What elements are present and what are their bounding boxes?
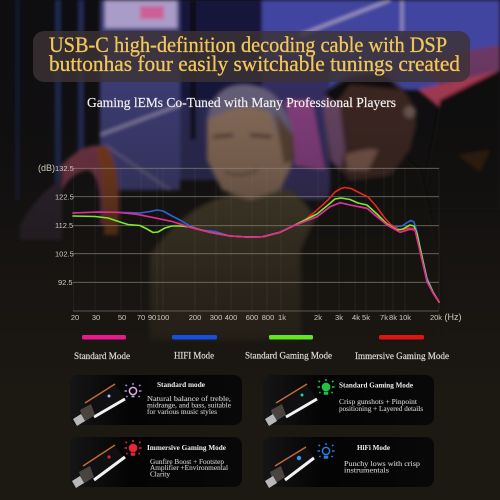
card: immersive gaming mode: Amplifier +Environmental (150, 463, 228, 472)
x axis labels: 400 (225, 313, 237, 322)
x axis labels: 3k (335, 313, 343, 322)
card: standard gaming mode: positioning + Layered details (339, 404, 423, 413)
curve: immersive gaming (190, 188, 439, 302)
icon: bulb (318, 443, 334, 458)
icon: cable device (265, 447, 314, 488)
x axis labels: 4k (352, 313, 360, 322)
card: hifi mode: instrumentals (344, 466, 389, 474)
card: immersive gaming mode (70, 437, 242, 488)
legend: standard mode: Standard Mode (74, 352, 130, 362)
subtitle: Gaming lEMs Co-Tuned with Many Professional Players (87, 96, 396, 111)
card: standard gaming mode (263, 375, 434, 426)
x axis labels: 600 (246, 313, 258, 322)
curves (73, 188, 439, 302)
icon: bulb (318, 379, 334, 394)
x axis labels: 20k (430, 313, 442, 322)
y axis labels: 122.5 (55, 192, 74, 202)
y axis labels: 102.5 (55, 250, 74, 258)
x axis labels: 8k (389, 313, 397, 322)
legend: immersive gaming mode: Immersive Gaming Mode (355, 352, 449, 362)
x axis labels: 800 (262, 313, 274, 322)
icon: bulb (124, 383, 142, 397)
card: standard mode: Natural balance of treble, (147, 394, 231, 403)
card: hifi mode (263, 437, 434, 488)
x axis labels: 200 (189, 313, 201, 322)
card: standard gaming mode: Crisp gunshots + Pinpoint (339, 397, 418, 406)
legend: standard gaming mode (245, 335, 332, 362)
legend: standard gaming mode: Standard Gaming Mode (245, 352, 332, 362)
title banner (33, 31, 470, 82)
blurred people (150, 73, 440, 340)
icon: cable device (72, 445, 125, 488)
legend (74, 335, 449, 362)
x axis labels (71, 312, 462, 322)
y axis labels: 132.5 (55, 164, 74, 173)
x axis labels: (Hz) (444, 312, 462, 322)
curve: standard gaming (73, 198, 439, 302)
x axis labels: 1k (278, 313, 286, 322)
icon: cable device (265, 384, 317, 426)
legend: hifi mode: HIFI Mode (174, 352, 214, 362)
card: standard mode (70, 375, 242, 426)
legend: immersive gaming mode (355, 335, 449, 362)
y axis labels: 92.5 (58, 278, 73, 287)
x axis labels: 7k (380, 313, 388, 322)
x axis labels: 10k (399, 313, 411, 322)
card: immersive gaming mode: Immersive Gaming Mode (147, 443, 227, 452)
x axis labels: 5k (362, 313, 370, 322)
curve: HIFI (73, 203, 439, 302)
legend: standard mode (74, 335, 130, 362)
x axis labels: 100 (157, 313, 169, 322)
x axis labels: 30 (92, 313, 100, 322)
card: hifi mode: Punchy lows with crisp (344, 459, 420, 468)
card: immersive gaming mode: Gunfire Boost + Footstep (150, 457, 224, 466)
y axis labels: (dB) (38, 163, 55, 173)
card: standard mode: for various music styles (147, 407, 217, 416)
icon: bulb (124, 440, 142, 455)
card: hifi mode: HiFi Mode (357, 443, 391, 452)
x axis labels: 90 (148, 313, 156, 322)
icon: cable device (73, 384, 125, 426)
card: standard mode: Standard mode (157, 380, 206, 389)
right person (300, 155, 440, 340)
x axis labels: 2k (314, 313, 322, 322)
blurred scene objects (62, 145, 119, 225)
x axis labels: 70 (137, 313, 145, 322)
x axis labels: 50 (118, 313, 126, 322)
x axis labels: 300 (210, 313, 222, 322)
frequency response chart (38, 163, 462, 322)
card: standard mode: midrange, and bass, suitable (147, 400, 232, 410)
legend: hifi mode (172, 335, 217, 362)
card: immersive gaming mode: Clarity (150, 470, 170, 478)
card: standard gaming mode: Standard Gaming Mode (339, 380, 414, 390)
y axis labels: 112.5 (55, 221, 73, 230)
curve: standard (73, 203, 439, 302)
y axis labels (38, 163, 74, 287)
title banner: buttonhas four easily switchable tunings created (49, 51, 460, 76)
title banner: USB-C high-definition decoding cable with DSP (49, 32, 447, 57)
x axis labels: 20 (71, 313, 79, 322)
left person (150, 190, 330, 340)
